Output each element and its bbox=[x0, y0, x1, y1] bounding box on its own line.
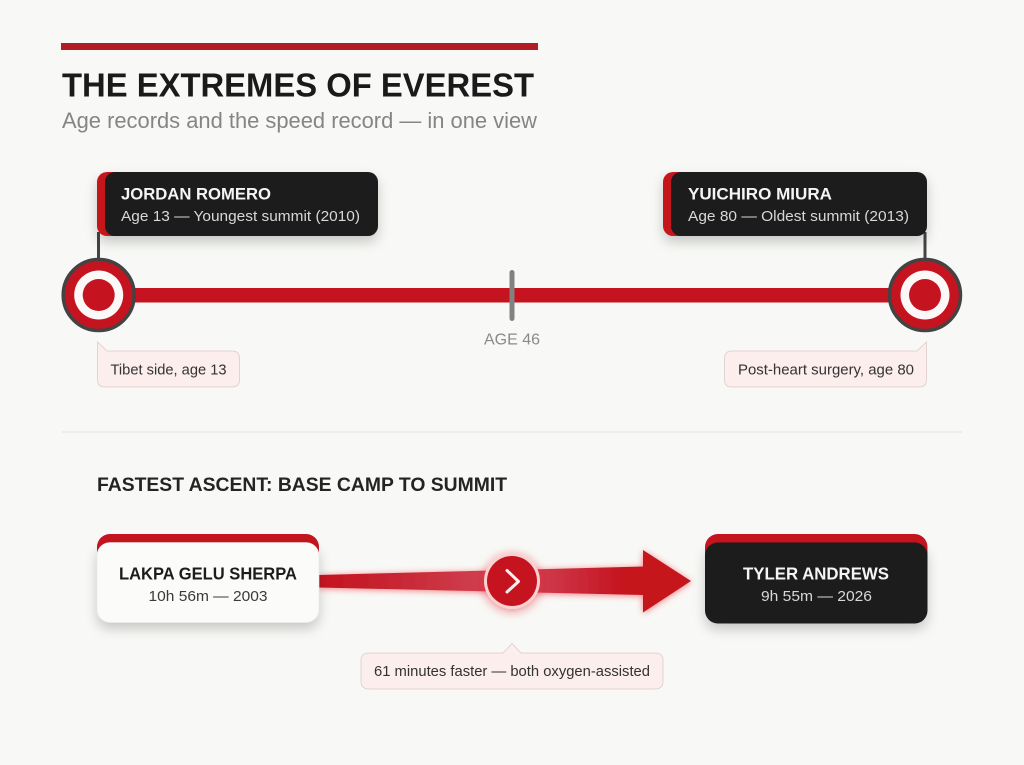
card: Tyler Andrews: 9h 55m — 2026 bbox=[761, 588, 872, 605]
speed arrow bbox=[319, 550, 691, 612]
subtitle: Age records and the speed record — in one view bbox=[62, 108, 537, 133]
card: Lakpa Gelu Sherpa bbox=[97, 534, 319, 622]
midpoint label: AGE 46 bbox=[484, 332, 540, 348]
card: Yuichiro Miura: YUICHIRO MIURA bbox=[688, 186, 832, 204]
callout: Tibet side bbox=[98, 342, 240, 387]
card: Tyler Andrews bbox=[705, 534, 928, 624]
callout: 61 minutes faster bbox=[361, 644, 663, 689]
section heading: FASTEST ASCENT: BASE CAMP TO SUMMIT bbox=[97, 474, 507, 496]
card: Lakpa Gelu Sherpa: LAKPA GELU SHERPA bbox=[119, 564, 297, 584]
connector right bbox=[924, 232, 926, 262]
timeline bar bbox=[130, 288, 895, 302]
marker: age 13 bbox=[63, 260, 134, 330]
card: Jordan Romero bbox=[97, 172, 378, 236]
title: THE EXTREMES OF EVEREST bbox=[62, 66, 534, 104]
card: Tyler Andrews: TYLER ANDREWS bbox=[743, 564, 889, 584]
callout: post-heart surgery bbox=[724, 342, 926, 387]
card: Jordan Romero: JORDAN ROMERO bbox=[121, 186, 271, 204]
callout: Tibet side: Tibet side, age 13 bbox=[110, 362, 226, 378]
midpoint tick bbox=[510, 270, 514, 321]
card: Lakpa Gelu Sherpa: 10h 56m — 2003 bbox=[148, 588, 268, 605]
callout: 61 minutes faster: 61 minutes faster — both oxygen-assisted bbox=[374, 664, 650, 680]
connector left bbox=[97, 232, 100, 262]
card: Yuichiro Miura bbox=[663, 172, 927, 236]
callout: post-heart surgery: Post-heart surgery, age 80 bbox=[738, 362, 914, 378]
card: Jordan Romero: Age 13 — Youngest summit (2010) bbox=[121, 209, 360, 225]
age timeline bbox=[63, 232, 960, 348]
title block bbox=[61, 43, 538, 104]
icon: chevron badge bbox=[484, 553, 540, 609]
marker: age 80 bbox=[890, 260, 960, 330]
card: Yuichiro Miura: Age 80 — Oldest summit (2013) bbox=[688, 209, 909, 225]
